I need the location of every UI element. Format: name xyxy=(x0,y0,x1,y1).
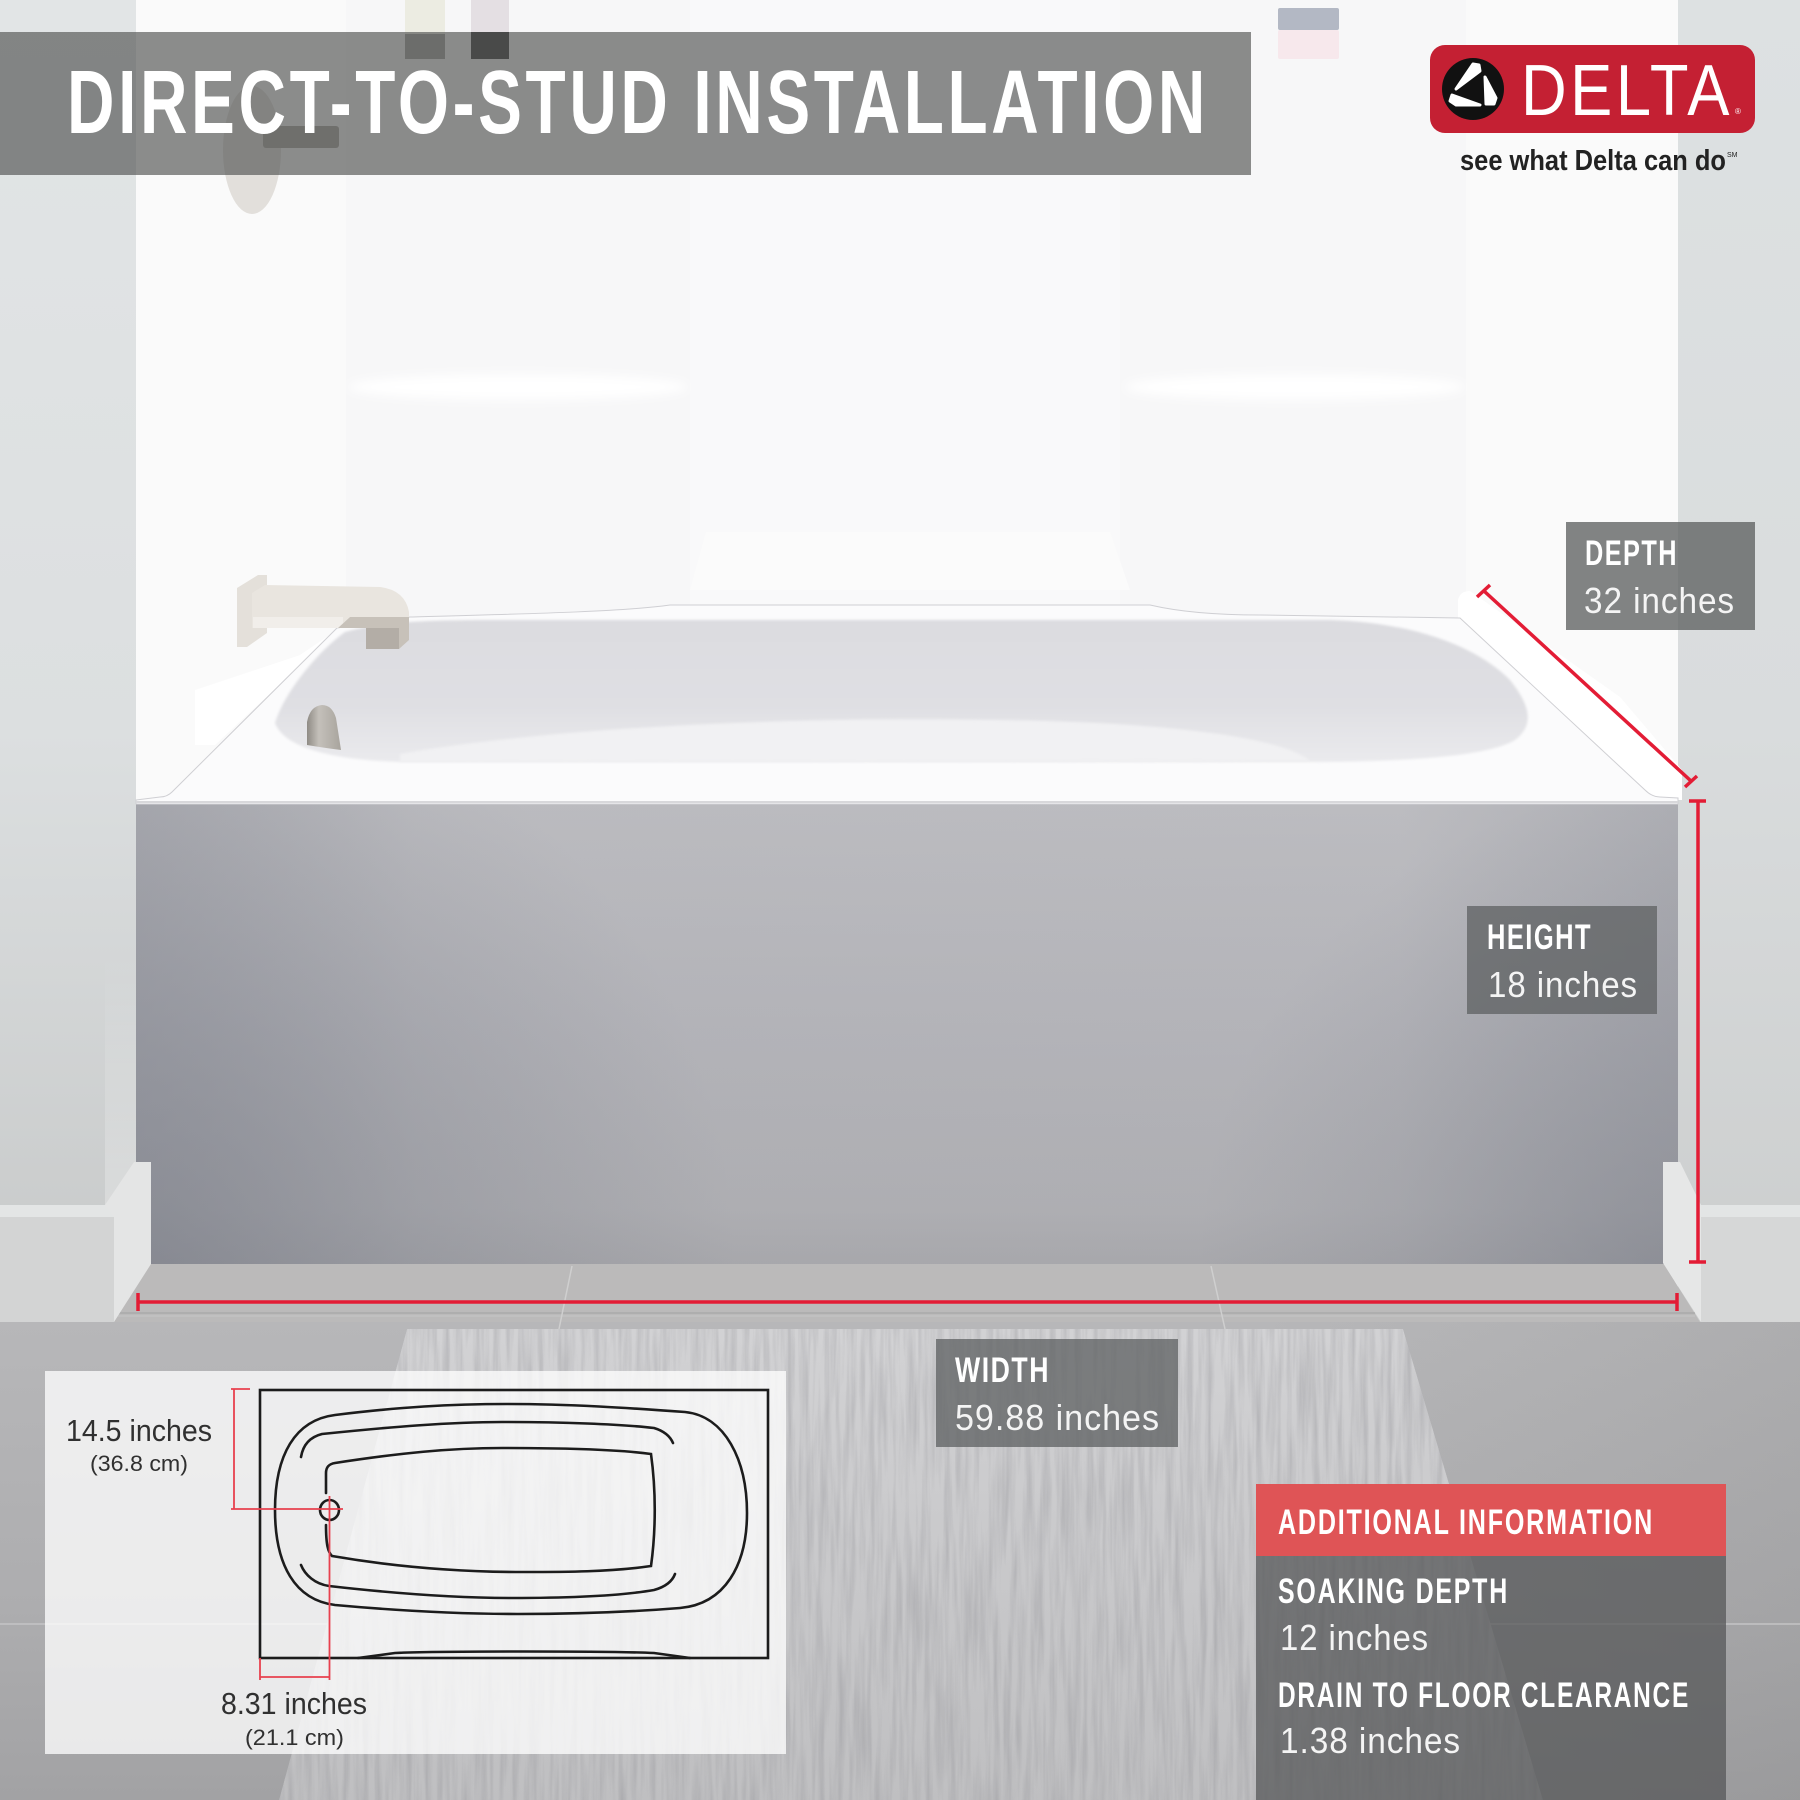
tub apron xyxy=(136,800,1678,1264)
title: DIRECT-TO-STUD INSTALLATION xyxy=(67,53,1209,153)
service mark: SM xyxy=(1727,152,1738,159)
tagline: see what Delta can do xyxy=(1460,145,1726,177)
shower valve xyxy=(223,86,339,214)
flange: left xyxy=(195,628,340,745)
label: depth: DEPTH xyxy=(1585,534,1678,573)
tub plan outline xyxy=(260,1390,768,1658)
width dimension line xyxy=(138,1293,1677,1311)
rug xyxy=(270,1329,1550,1800)
overflow plate xyxy=(307,705,341,750)
plan label: 14.5 inches: (36.8 cm) xyxy=(90,1451,188,1476)
drain to floor clearance xyxy=(1278,1676,1690,1761)
label: depth: 32 inches xyxy=(1584,580,1735,621)
panel: plan view diagram xyxy=(45,1371,786,1754)
label: height: HEIGHT xyxy=(1487,918,1592,957)
tub spout xyxy=(237,575,409,649)
label: width xyxy=(936,1339,1178,1447)
plan label: 8.31 inches: (21.1 cm) xyxy=(245,1725,344,1750)
floor xyxy=(0,1264,1800,1800)
soaking depth xyxy=(1278,1572,1509,1658)
soaking depth: SOAKING DEPTH xyxy=(1278,1572,1509,1611)
background: right wall xyxy=(1678,0,1800,1330)
title bar xyxy=(0,32,1251,175)
label: width: WIDTH xyxy=(955,1351,1050,1390)
tub rim and deck xyxy=(136,591,1682,804)
left baseboard xyxy=(0,1162,151,1322)
right baseboard xyxy=(1663,1162,1800,1322)
label: depth xyxy=(1566,522,1755,630)
basin floor xyxy=(400,719,1310,762)
plan label: 8.31 inches: 8.31 inches xyxy=(221,1686,367,1721)
wordmark: DELTA xyxy=(1521,51,1733,131)
label: height: 18 inches xyxy=(1488,964,1638,1005)
deck xyxy=(136,605,1678,804)
plan dimension lines xyxy=(231,1389,343,1680)
depth dimension line xyxy=(1477,585,1697,787)
basin xyxy=(275,620,1528,762)
drain to floor clearance: 1.38 inches xyxy=(1280,1720,1461,1761)
shower surround xyxy=(136,0,1678,810)
label: height xyxy=(1467,906,1657,1014)
flange: right xyxy=(1458,591,1682,800)
soaking depth: 12 inches xyxy=(1280,1617,1429,1658)
logo mark xyxy=(1442,58,1504,120)
plan label: 14.5 inches: 14.5 inches xyxy=(66,1413,212,1448)
panel: additional information xyxy=(1256,1484,1726,1800)
shelf bottles xyxy=(405,0,1339,59)
label: width: 59.88 inches xyxy=(955,1397,1160,1438)
panel heading: ADDITIONAL INFORMATION xyxy=(1278,1503,1654,1542)
registered mark: ® xyxy=(1735,107,1741,116)
background: left wall xyxy=(0,0,136,1330)
Delta logo xyxy=(1430,45,1755,177)
height dimension line xyxy=(1689,801,1706,1262)
plan label: 14.5 inches xyxy=(66,1413,212,1476)
plan label: 8.31 inches xyxy=(221,1686,367,1750)
